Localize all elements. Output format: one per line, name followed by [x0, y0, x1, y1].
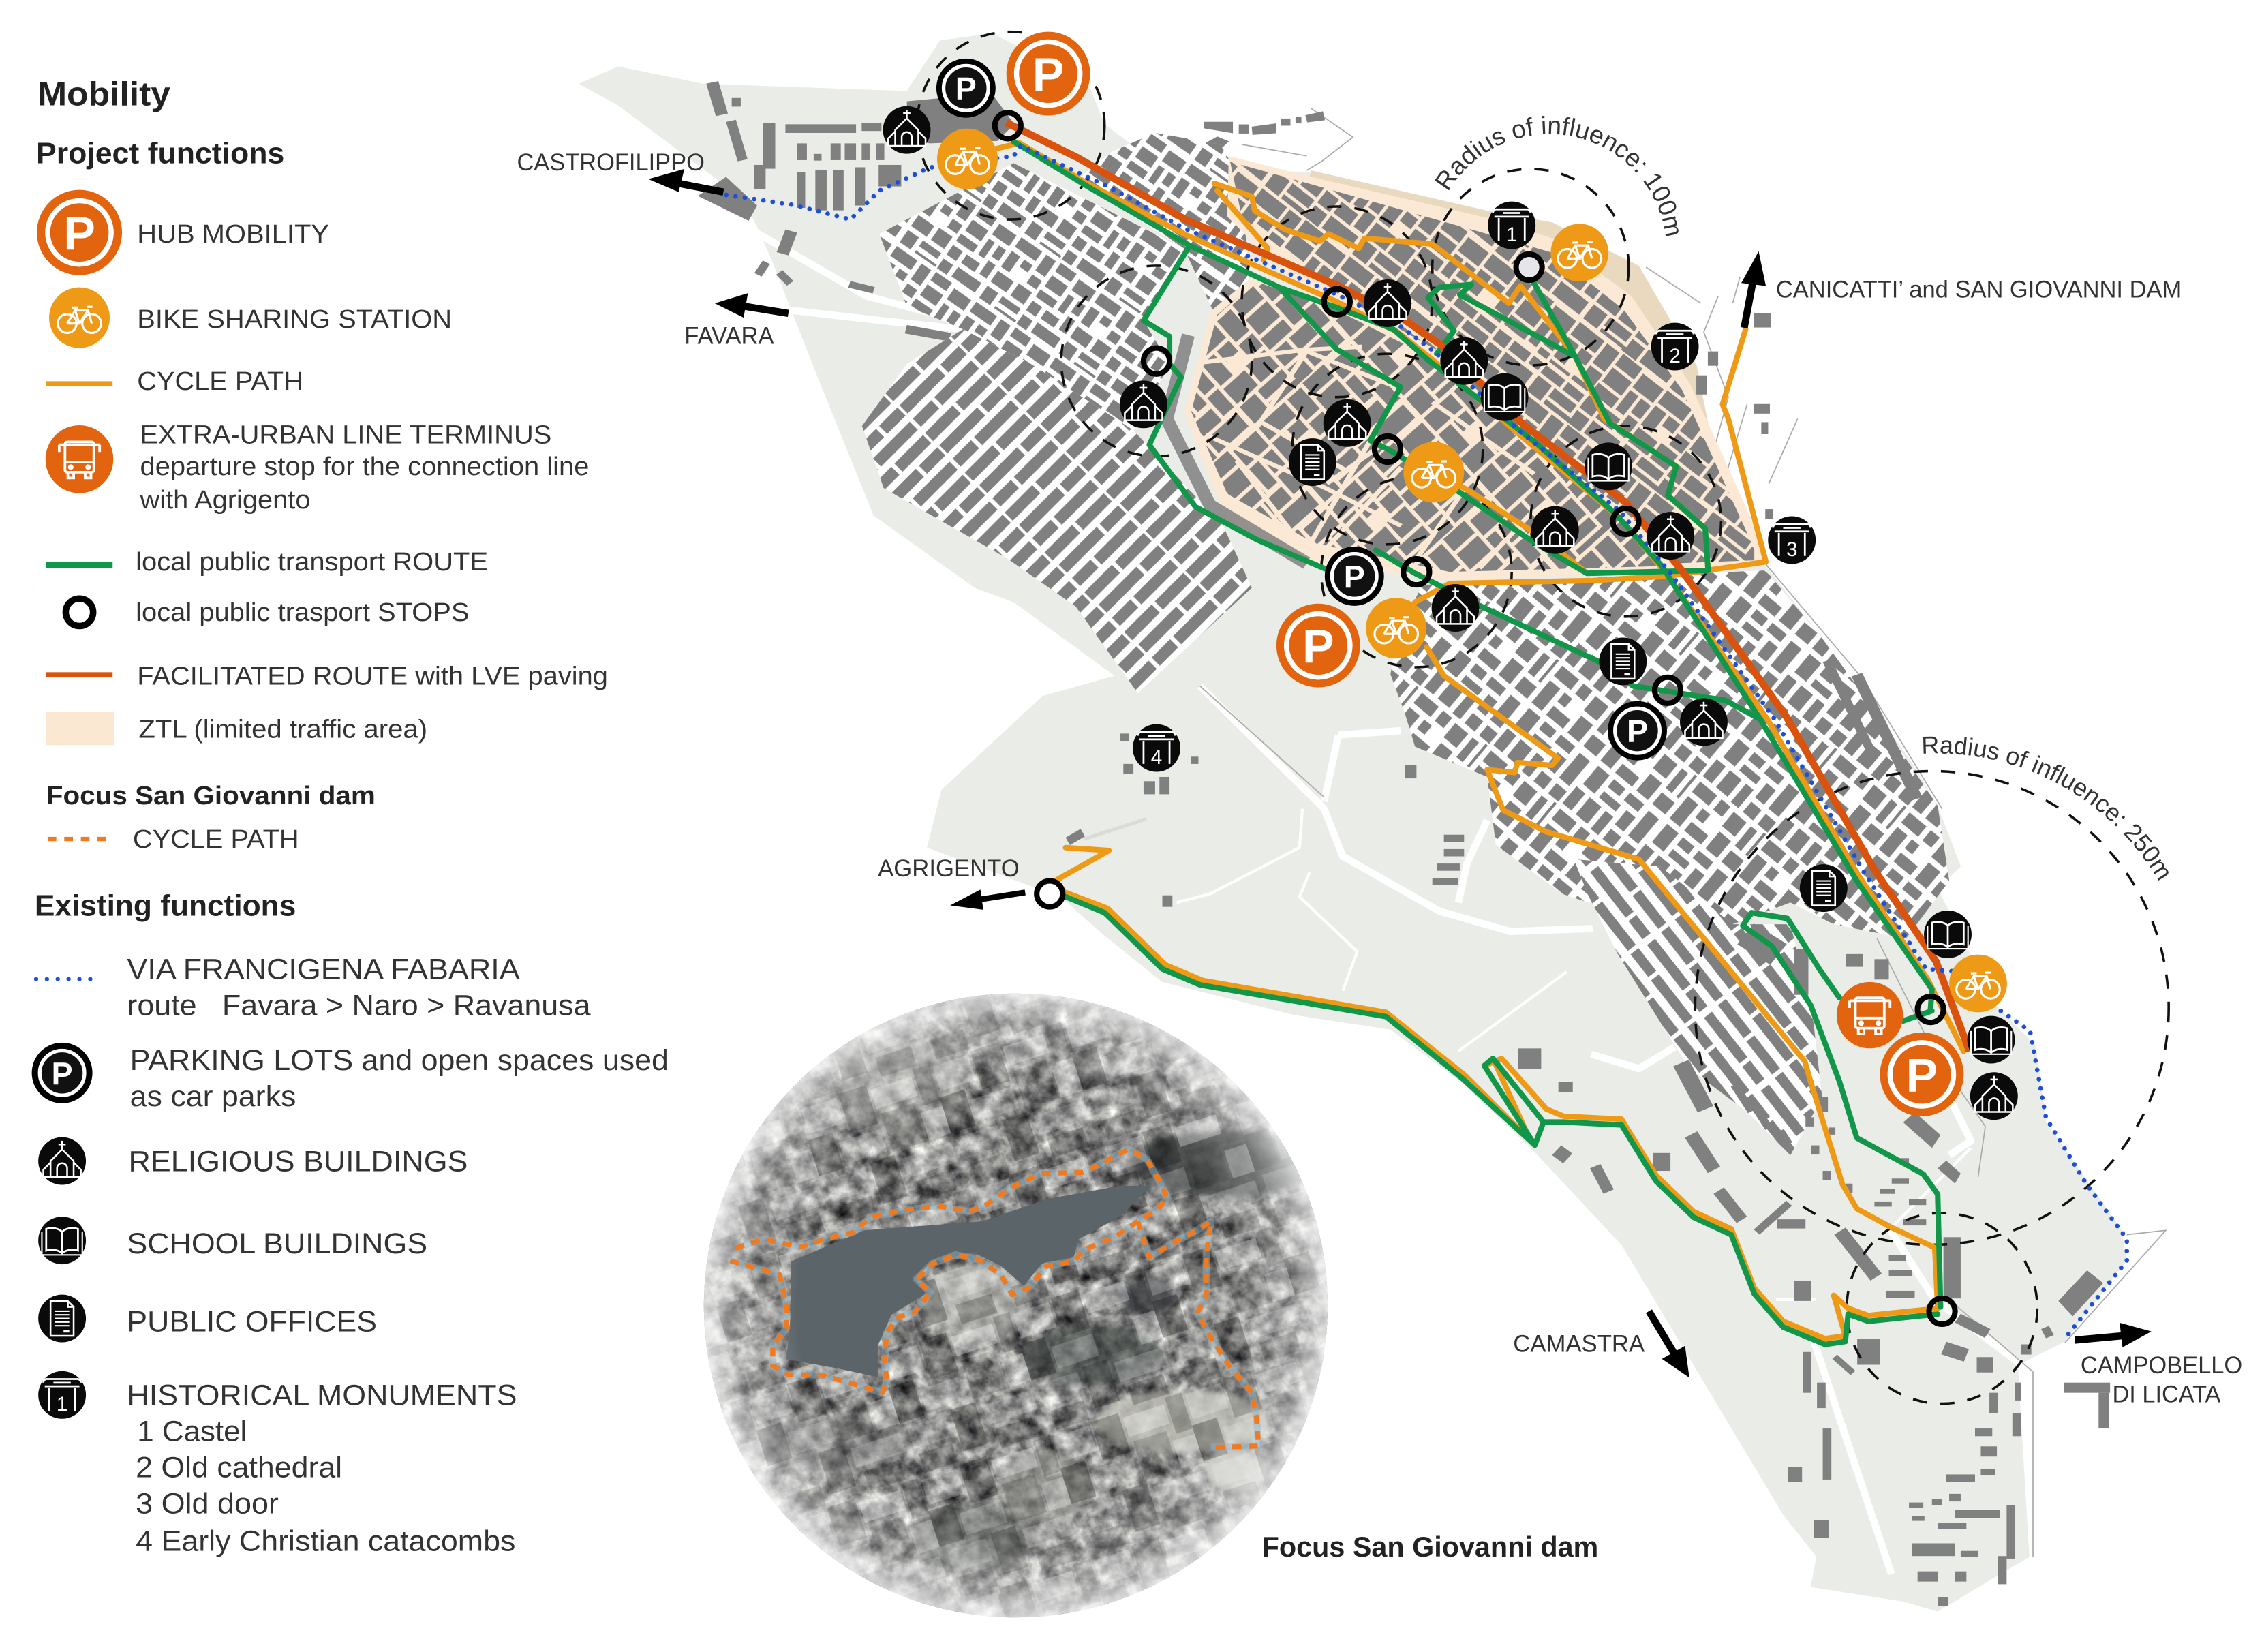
icon: bus terminus — [46, 425, 113, 493]
icon: religious — [38, 1137, 86, 1185]
icon: parking lots — [32, 1043, 93, 1103]
legend text: religious: RELIGIOUS BUILDINGS — [129, 1145, 468, 1177]
urban blocks: north-east white street cluster — [1075, 133, 1249, 311]
arrow: Campobello — [2075, 1323, 2152, 1347]
legend text: dam cycle path: CYCLE PATH — [133, 825, 299, 854]
aerial: lake — [786, 1186, 1152, 1377]
map place labels: CASTROFILIPPO — [517, 149, 705, 176]
arrow: Canicatti — [1741, 251, 1766, 328]
arrow: Favara — [715, 293, 789, 318]
local public transport stops — [995, 112, 1955, 1324]
icon: parking lots on map: P — [1344, 559, 1365, 594]
legend text: facilitated route: FACILITATED ROUTE with LVE paving — [137, 661, 608, 690]
legend text: bus terminus: EXTRA-URBAN LINE TERMINUS — [140, 420, 551, 449]
legend text: parking lots: PARKING LOTS and open spaces used — [130, 1044, 669, 1076]
legend text: bus terminus: with Agrigento — [139, 485, 311, 515]
legend line: dam cycle path — [48, 838, 112, 840]
icon: historical monuments on map: 3 — [1786, 538, 1797, 561]
legend text: via francigena — [127, 953, 591, 1022]
legend text: stops: local public trasport STOPS — [136, 598, 470, 627]
legend text: monuments: 1 Castel — [137, 1416, 247, 1448]
label: radius of influence 100m: Radius of influence: 100m — [1435, 116, 1679, 236]
routes: local public transport — [1013, 142, 1940, 1345]
icon: hub mobility: P — [63, 207, 95, 260]
urban blocks: south long strips — [1574, 859, 1822, 1155]
arrow: Castrofilippo — [648, 169, 723, 192]
urban blocks: north-west strip — [698, 81, 1014, 341]
legend text: cycle path: CYCLE PATH — [137, 367, 303, 396]
arrow: Agrigento — [950, 889, 1025, 910]
icon: bike sharing — [49, 288, 110, 348]
icon: hub mobility — [37, 190, 122, 275]
ZTL limited traffic area — [1184, 156, 1766, 581]
heading: focus: Focus San Giovanni dam — [46, 781, 376, 810]
map land — [579, 33, 2127, 1612]
arrow: Camastra — [1649, 1311, 1689, 1377]
urban blocks: ring around historic centre — [1167, 335, 1306, 563]
legend line: cycle path — [46, 381, 112, 386]
urban blocks: east edge small buildings — [1696, 313, 1923, 801]
map place labels: DI LICATA — [2113, 1381, 2221, 1407]
legend text: parking lots: as car parks — [130, 1080, 296, 1112]
label: radius of influence 250m: Radius of influence: 250m — [1923, 736, 2169, 881]
icon: historical monuments on map: 4 — [1151, 746, 1162, 769]
map: Favara town plan — [579, 33, 2166, 1612]
urban blocks: town south of centre — [1390, 570, 1949, 938]
icon: historical monuments on map — [1133, 202, 1816, 772]
caption: focus San Giovanni dam: Focus San Giovanni dam — [1262, 1531, 1598, 1563]
legend text: monuments: 4 Early Christian catacombs — [136, 1525, 515, 1557]
icon: offices — [38, 1295, 86, 1343]
icon: mobility hubs on map: P — [1032, 48, 1064, 101]
aerial photo: focus San Giovanni dam — [693, 982, 1336, 1632]
map place labels — [517, 149, 2242, 1407]
urban blocks: historic centre south of corridor — [1191, 281, 1660, 572]
routes: dashed radius-of-influence circles — [917, 32, 2169, 1404]
icon: bike sharing stations on map — [937, 129, 2007, 1012]
legend text: bus terminus: departure stop for the connection line — [140, 452, 589, 481]
legend swatch: ZTL — [46, 712, 114, 745]
urban blocks: southern scattered buildings — [1518, 923, 2110, 1606]
icon: mobility hubs on map: P — [1302, 620, 1334, 673]
legend line: facilitated route — [46, 672, 112, 677]
icon: public offices on map — [1289, 438, 1848, 912]
historic centre streets — [1197, 265, 1620, 568]
urban blocks: west long strips — [862, 329, 1252, 693]
heading: existing functions: Existing functions — [35, 889, 296, 922]
icon: parking lots on map: P — [955, 71, 977, 106]
urban blocks: north-west grid — [879, 163, 1184, 430]
routes: cycle paths — [970, 143, 1963, 1339]
title: Mobility — [37, 76, 170, 113]
legend text: ZTL: ZTL (limited traffic area) — [138, 715, 427, 744]
icon: mobility hubs on map: P — [1906, 1049, 1938, 1102]
legend text: monuments: 2 Old cathedral — [136, 1452, 342, 1484]
legend line: local transport route — [46, 562, 112, 568]
urban blocks: historic centre north of corridor — [1230, 162, 1754, 563]
icon: parking lots on map — [936, 59, 1667, 761]
icon: monuments: 1 — [57, 1393, 67, 1416]
legend text: monuments — [127, 1379, 517, 1557]
urban blocks: north top strip — [1204, 111, 1325, 157]
icon: monuments — [38, 1371, 86, 1419]
legend text: via francigena: route Favara > Naro > Ravanusa — [127, 990, 591, 1022]
legend text: via francigena: VIA FRANCIGENA FABARIA — [127, 953, 520, 985]
map place labels: CAMPOBELLO — [2081, 1352, 2242, 1379]
icon: school buildings on map — [1481, 373, 2015, 1064]
legend line: via francigena — [36, 978, 97, 980]
map roads — [754, 231, 2033, 1574]
legend text: hub mobility: HUB MOBILITY — [137, 219, 329, 249]
map place labels: CAMASTRA — [1513, 1330, 1645, 1357]
map place labels: AGRIGENTO — [878, 855, 1020, 882]
legend text: parking lots — [130, 1044, 669, 1112]
legend text: monuments: HISTORICAL MONUMENTS — [127, 1379, 517, 1411]
aerial tonal patches — [754, 1039, 1320, 1570]
routes: Via Francigena Fabaria — [726, 146, 2127, 1339]
legend text: bike sharing: BIKE SHARING STATION — [137, 305, 452, 334]
icon: stop — [65, 598, 93, 626]
icon: historical monuments on map: 1 — [1506, 224, 1517, 246]
icon: parking lots: P — [52, 1056, 73, 1091]
map road outlines — [1200, 108, 2166, 1557]
icon: school — [38, 1217, 86, 1264]
panel: legend — [32, 76, 669, 1557]
aerial: edge vignette — [704, 994, 1328, 1617]
icon: parking lots on map: P — [1627, 714, 1648, 749]
map place labels: CANICATTI’ and SAN GIOVANNI DAM — [1776, 276, 2182, 303]
legend text: bus terminus — [139, 420, 589, 515]
icon: mobility hubs on map — [1007, 32, 1963, 1116]
ZTL northern tan band — [1308, 170, 1708, 423]
legend text: offices: PUBLIC OFFICES — [127, 1306, 377, 1338]
heading: project functions: Project functions — [36, 137, 284, 170]
icon: extra-urban bus terminus on map — [1837, 982, 1903, 1048]
legend text: route: local public transport ROUTE — [136, 547, 488, 577]
icon: religious buildings on map — [883, 106, 2018, 1120]
map place labels: FAVARA — [684, 322, 774, 349]
legend text: school: SCHOOL BUILDINGS — [127, 1227, 427, 1259]
aerial: dam cycle path — [729, 1149, 1259, 1448]
legend text: monuments: 3 Old door — [136, 1488, 279, 1520]
routes: facilitated route with LVE paving — [1007, 123, 1970, 1052]
urban blocks: small cluster beside southern road — [1066, 733, 1464, 907]
aerial field patchwork — [693, 982, 1336, 1632]
icon: historical monuments on map: 2 — [1669, 345, 1681, 367]
